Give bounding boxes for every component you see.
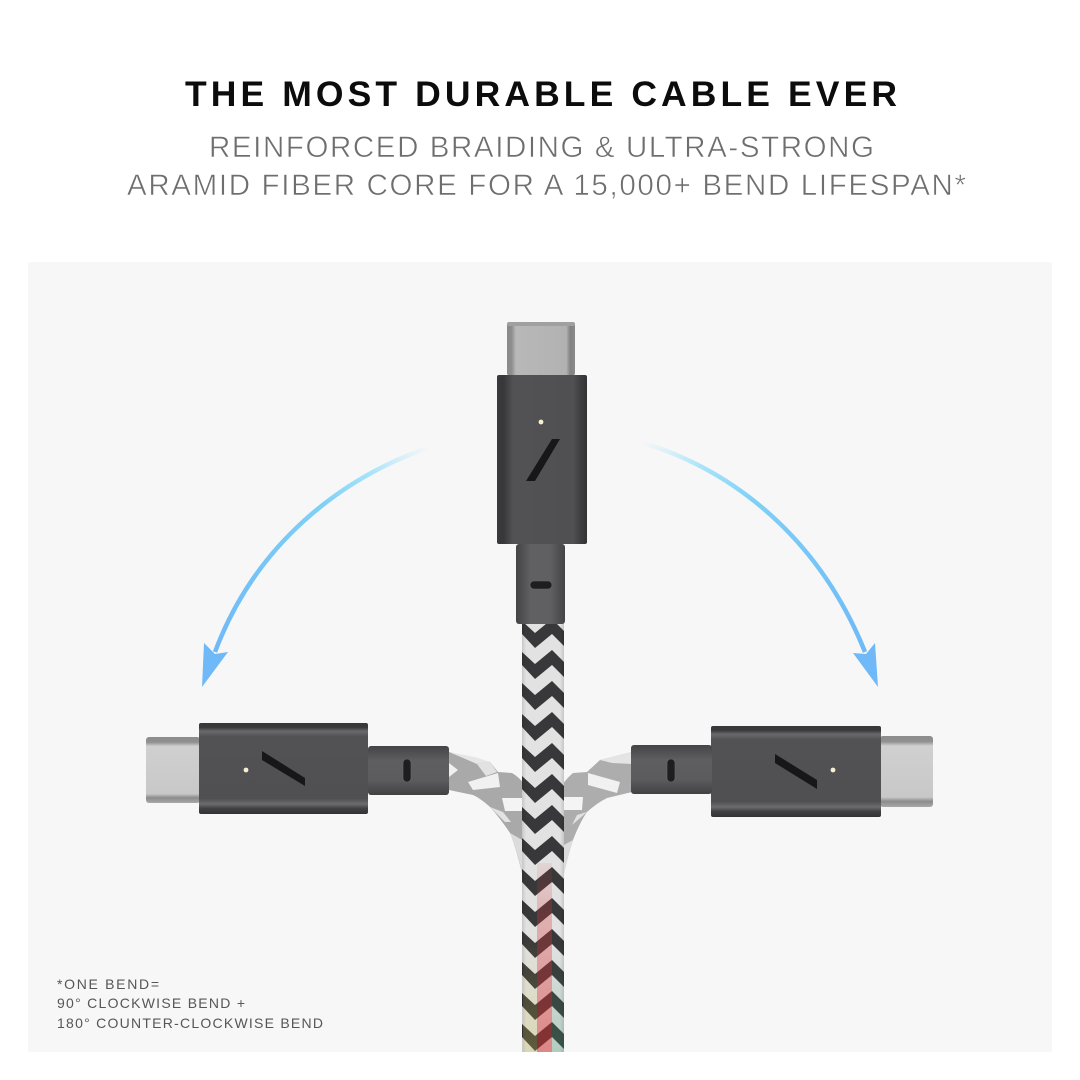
footnote: 90° CLOCKWISE BEND + [57,995,245,1011]
footnote [57,976,323,1031]
footnote: *ONE BEND= [57,976,159,992]
panel: product background [28,262,1052,1052]
right bent cable braid [562,752,632,882]
subtitle: REINFORCED BRAIDING & ULTRA-STRONG [209,131,874,164]
footnote: 180° COUNTER-CLOCKWISE BEND [57,1015,323,1031]
arrow: right bend [640,442,878,687]
center connector [497,322,587,624]
subtitle: ARAMID FIBER CORE FOR A 15,000+ BEND LIFESPAN* [127,169,967,202]
right connector [631,726,933,817]
title: THE MOST DURABLE CABLE EVER [185,74,897,114]
arrow: left bend [202,447,430,687]
left connector [146,723,449,814]
left bent cable braid [449,752,524,882]
subtitle [127,131,967,202]
braided main cable [522,622,564,1052]
